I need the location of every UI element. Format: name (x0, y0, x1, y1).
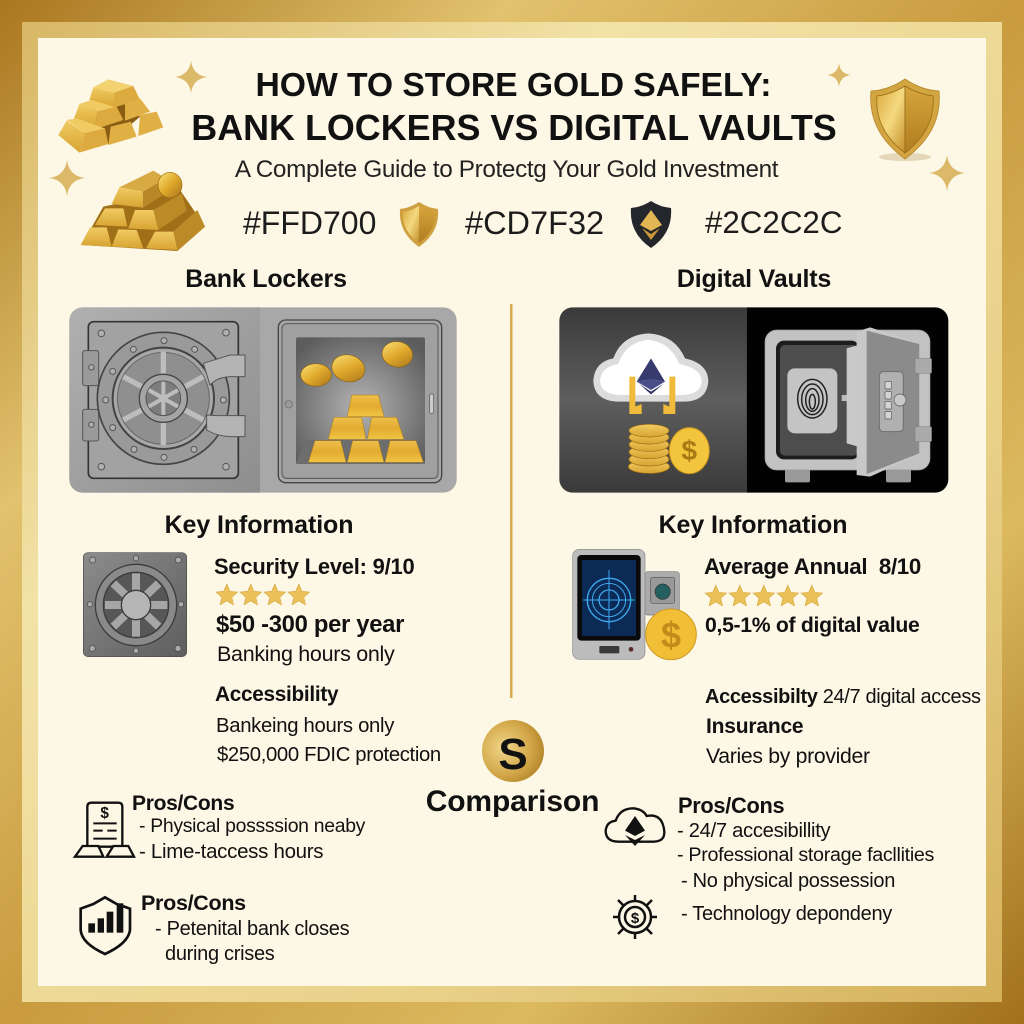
colour code: charcoal: #2C2C2C (705, 205, 842, 240)
icon: small bronze shield (400, 202, 438, 247)
colour code: bronze: #CD7F32 (465, 205, 604, 241)
pros cons block 2: Pros/Cons (141, 891, 246, 915)
icon: dark shield (630, 201, 672, 248)
heading: Key Information right: Key Information (659, 511, 847, 539)
accessibility text left: Bankeing hours only (216, 715, 394, 737)
icon: coin network (613, 895, 657, 939)
pros cons text: - Petenital bank closes (155, 918, 349, 940)
pros cons block 1: Pros/Cons (132, 792, 234, 815)
technology dependency: - Technology depondeny (681, 903, 892, 925)
icon: digital device and coin: $ (661, 615, 681, 656)
icon: document on gold bars: $ (100, 805, 109, 822)
pros cons item: - Lime-taccess hours (139, 840, 323, 863)
icon: safe dial (83, 552, 187, 657)
pros cons item: - 24/7 accesibillity (677, 820, 830, 842)
heading: Comparison: Comparison (426, 785, 599, 818)
pros cons item: - No physical possession (681, 870, 895, 892)
icon: coin network: $ (631, 910, 640, 927)
accessibility heading left: Accessibility (215, 683, 338, 706)
icon: gold bar stack top left (58, 79, 164, 153)
icon: shield with bars (79, 896, 132, 956)
pros cons item: - Professional storage facllities (677, 844, 934, 866)
insurance text right: Varies by provider (706, 745, 870, 768)
illustration: digital vault (559, 307, 948, 493)
hours left: Banking hours only (217, 642, 394, 666)
star rating left (216, 583, 310, 606)
icon: sparkles (49, 61, 965, 196)
icon: S coin: S (498, 730, 528, 779)
right key info text: Average Annual 8/10 (704, 554, 921, 579)
colour code: gold: #FFD700 (243, 205, 376, 241)
illustration: bank locker (69, 307, 457, 493)
pros cons item: - Physical possssion neaby (139, 815, 365, 837)
fee right: 0,5-1% of digital value (705, 614, 919, 637)
insurance heading right: Insurance (706, 715, 803, 738)
icon: cloud with ethereum (604, 807, 666, 846)
subtitle: A Complete Guide to Protectg Your Gold Investment (235, 156, 778, 182)
icon: S coin (482, 720, 544, 782)
left key info text: Security Level: 9/10 (214, 554, 414, 579)
accessibility right: Accessibilty 24/7 digital access (705, 686, 981, 708)
illustration: digital vault: $ (682, 435, 698, 466)
icon: gold bars with coin (80, 170, 205, 251)
title: HOW TO STORE GOLD SAFELY: (256, 66, 771, 104)
icon: digital device and coin (572, 549, 697, 660)
icon: document on gold bars (72, 802, 136, 858)
star rating right (704, 584, 824, 606)
title line 2: BANK LOCKERS VS DIGITAL VAULTS (191, 108, 837, 148)
heading: Key Information left: Key Information (165, 511, 353, 539)
insurance text left: $250,000 FDIC protection (217, 744, 441, 766)
pros cons text: during crises (165, 943, 274, 965)
heading: Bank Lockers: Bank Lockers (185, 265, 347, 293)
heading: Digital Vaults: Digital Vaults (677, 265, 831, 293)
icon: gold shield (870, 78, 940, 161)
pros cons block 3: Pros/Cons (678, 793, 784, 818)
divider (510, 304, 512, 698)
cost left: $50 -300 per year (216, 611, 404, 638)
